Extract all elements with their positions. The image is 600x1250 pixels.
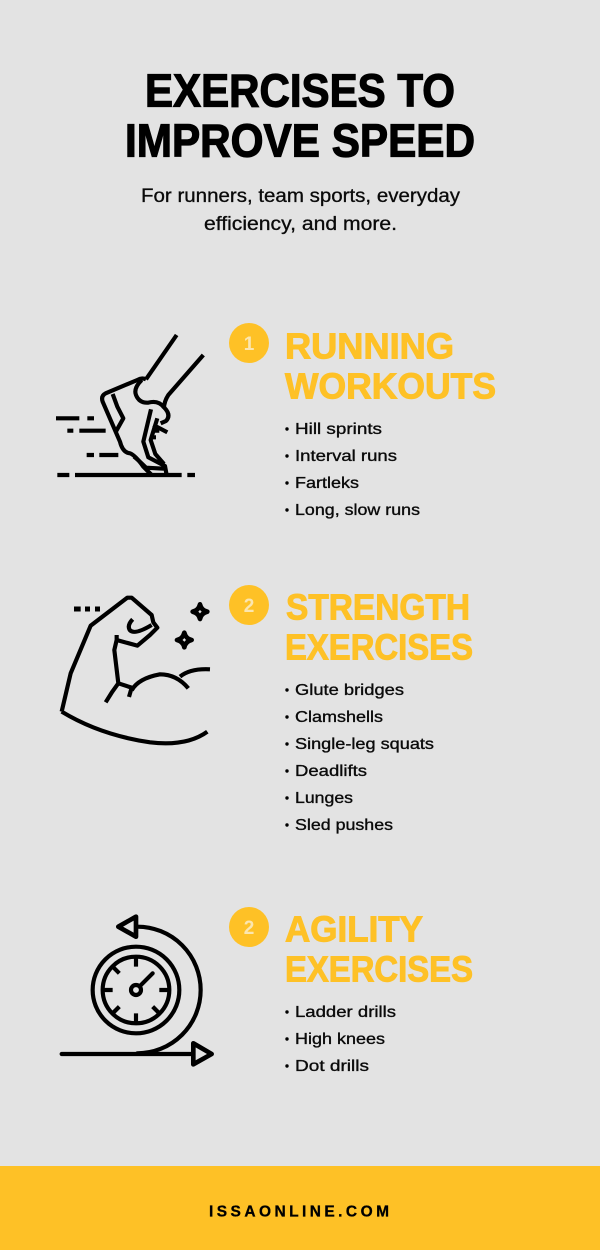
- heading: running workouts: WORKOUTS: [285, 366, 496, 406]
- list: agility exercises: Ladder drills: [295, 1004, 396, 1021]
- icon: flexed arm: [62, 598, 210, 743]
- subtitle: [141, 186, 461, 235]
- list: strength exercises: Lunges: [295, 790, 353, 807]
- subtitle: For runners, team sports, everyday: [141, 186, 461, 207]
- list: agility exercises: Dot drills: [295, 1058, 369, 1075]
- heading: running workouts: [285, 326, 496, 406]
- title: EXERCISES TO: [145, 64, 455, 116]
- number badge 2: [229, 585, 269, 625]
- panel: running workouts: [56, 323, 496, 519]
- list: running workouts: Hill sprints: [295, 421, 382, 438]
- list: strength exercises: Glute bridges: [295, 682, 404, 699]
- list: running workouts: [285, 421, 420, 519]
- number badge 3: 2: [244, 918, 254, 939]
- heading: agility exercises: AGILITY: [285, 908, 423, 950]
- panel: strength exercises: [62, 585, 473, 834]
- heading: agility exercises: [285, 908, 473, 990]
- list: running workouts: Long, slow runs: [295, 502, 420, 519]
- title: [125, 64, 475, 166]
- heading: agility exercises: EXERCISES: [285, 948, 473, 990]
- list: strength exercises: Deadlifts: [295, 763, 367, 780]
- icon: running shoe: [56, 335, 203, 475]
- list: strength exercises: Sled pushes: [295, 817, 393, 834]
- heading: strength exercises: [285, 586, 473, 668]
- panel: agility exercises: [62, 907, 473, 1075]
- number badge 1: [229, 323, 269, 363]
- footer band: [0, 1166, 600, 1250]
- footer band: ISSAONLINE.COM: [209, 1204, 389, 1220]
- heading: strength exercises: EXERCISES: [285, 626, 473, 668]
- number badge 3: [229, 907, 269, 947]
- number badge 1: 1: [244, 334, 255, 355]
- subtitle: efficiency, and more.: [204, 214, 397, 235]
- heading: running workouts: RUNNING: [285, 326, 454, 366]
- list: strength exercises: Clamshells: [295, 709, 383, 726]
- list: strength exercises: Single-leg squats: [295, 736, 434, 753]
- list: running workouts: Interval runs: [295, 448, 397, 465]
- list: agility exercises: [285, 1004, 396, 1075]
- heading: strength exercises: STRENGTH: [286, 586, 470, 628]
- title: IMPROVE SPEED: [125, 114, 475, 166]
- number badge 2: 2: [244, 596, 254, 617]
- list: running workouts: Fartleks: [295, 475, 359, 492]
- icon: stopwatch with looping arrow: [62, 917, 212, 1064]
- list: strength exercises: [285, 682, 434, 834]
- list: agility exercises: High knees: [295, 1031, 385, 1048]
